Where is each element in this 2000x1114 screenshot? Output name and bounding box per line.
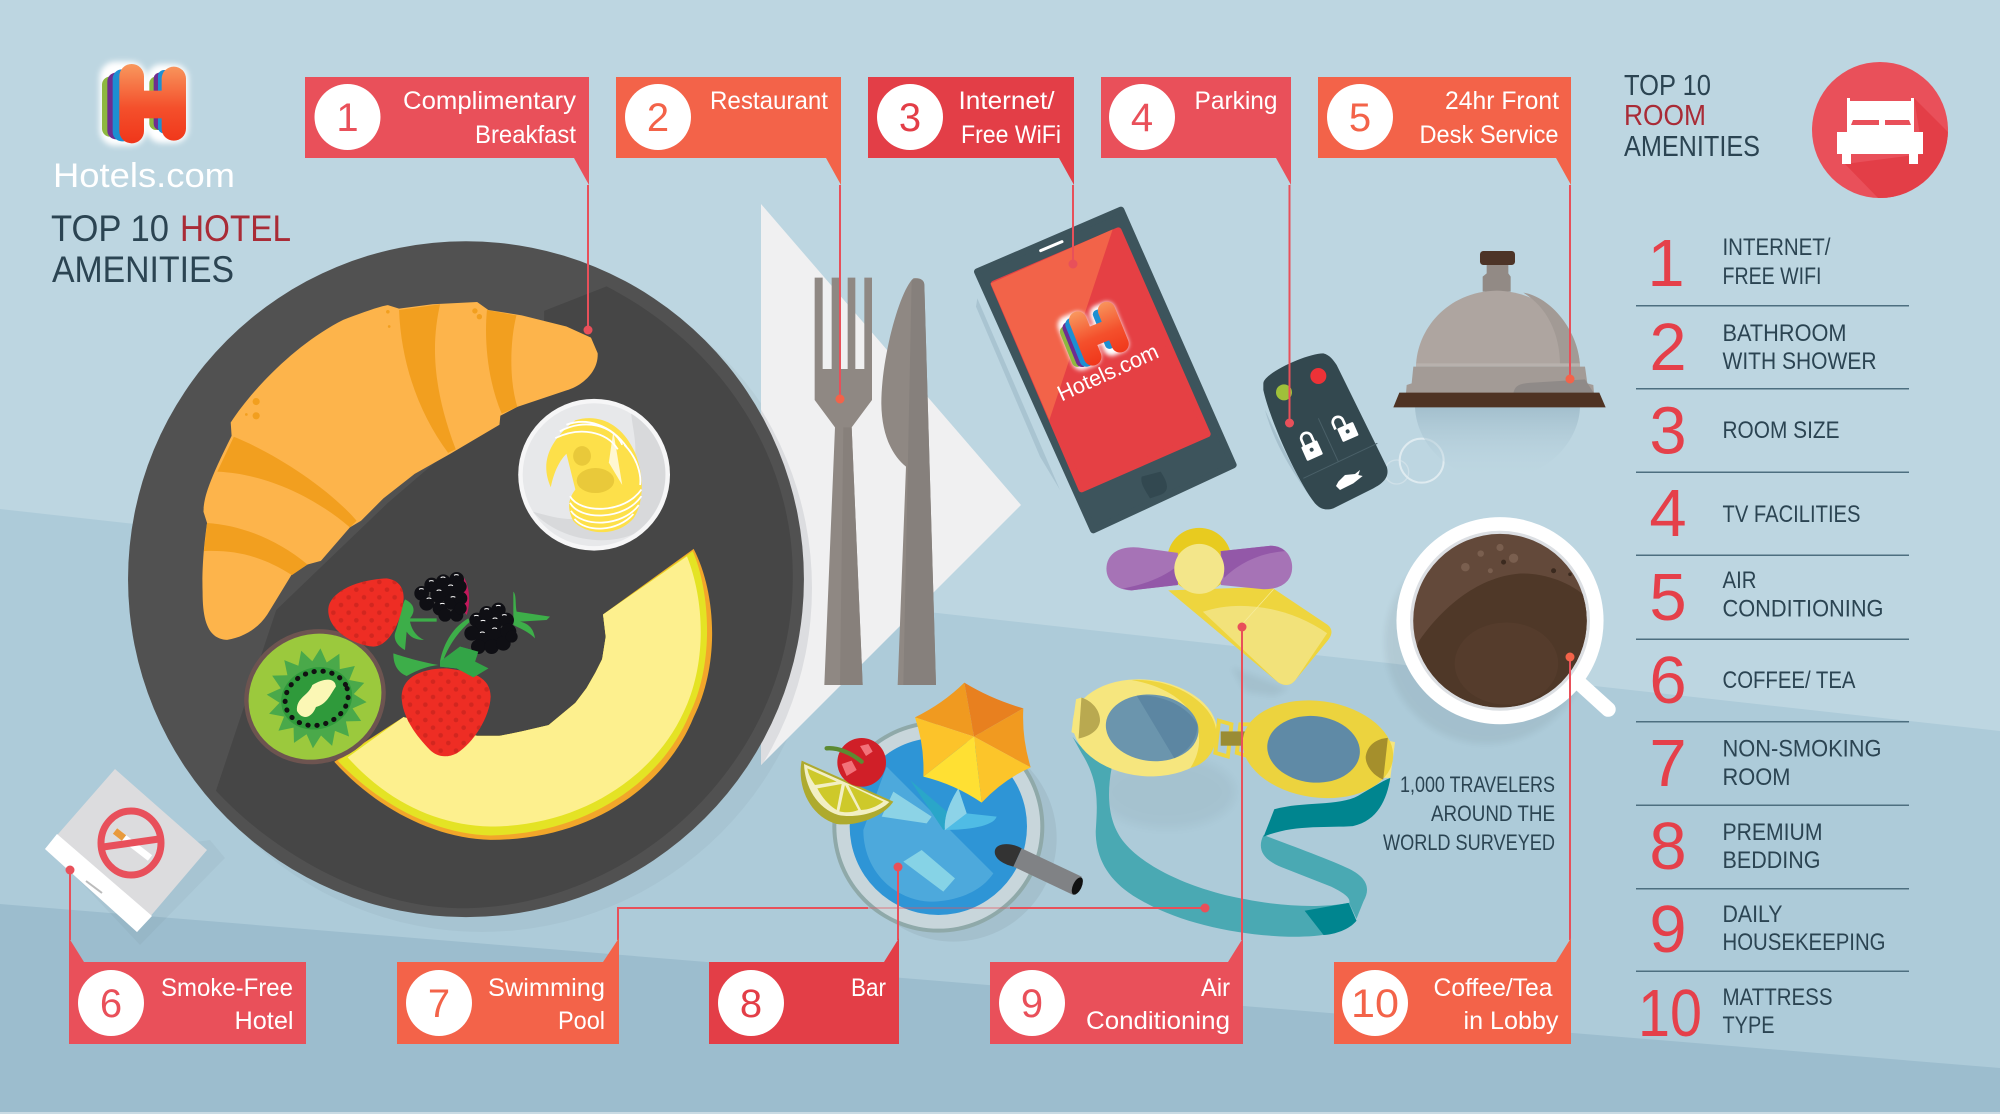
label 5: 24hr front desk service: 24hr Front: [1445, 87, 1559, 115]
fruit: kiwi, strawberries, blackberries: [222, 572, 550, 787]
heading: top 10 room amenities: AMENITIES: [1624, 131, 1760, 163]
shadow of bell: [1415, 407, 1580, 480]
phone wordmark: Hotels.com: [1053, 339, 1162, 406]
label 4: parking: [1101, 77, 1291, 185]
melon slice: [334, 549, 712, 840]
knife: [881, 278, 936, 685]
front strawberry: [402, 668, 491, 756]
butter dish: [518, 399, 670, 551]
row 8: BEDDING: [1722, 847, 1820, 874]
label 9: air conditioning: Conditioning: [1086, 1007, 1230, 1035]
strap: [1072, 737, 1390, 937]
room amenities ranking list: [1636, 226, 1909, 1051]
smoke-free sign: [45, 769, 225, 945]
heading: top 10 room amenities: [1624, 70, 1760, 163]
label 10: coffee/tea in lobby: [1334, 938, 1571, 1044]
label 9: air conditioning: [990, 938, 1243, 1044]
icon: no smoking: [101, 811, 161, 875]
row 1: INTERNET/: [1722, 234, 1831, 261]
row 6: [1649, 643, 1856, 718]
phone logo: [1055, 297, 1132, 373]
label 1: complimentary breakfast: Complimentary: [403, 87, 577, 115]
label 6: smoke-free hotel: [69, 938, 306, 1044]
cocktail: [801, 683, 1085, 942]
title: top 10 hotel amenities: AMENITIES: [52, 249, 234, 290]
row 5: AIR: [1722, 567, 1756, 594]
blackberry right: [464, 603, 518, 654]
label 9: air conditioning: Air: [1201, 974, 1230, 1002]
label 3: internet / free wifi: [868, 77, 1074, 185]
fork: [815, 278, 872, 685]
napkin: [761, 204, 1021, 765]
row 3: ROOM SIZE: [1722, 417, 1840, 444]
label 7: swimming pool: Pool: [558, 1007, 605, 1035]
label 7: swimming pool: [397, 938, 619, 1044]
label 1: complimentary breakfast: [305, 77, 589, 185]
key fob and bell: [1263, 251, 1606, 509]
heading: top 10 room amenities: TOP 10: [1624, 70, 1711, 102]
lime: [801, 761, 893, 824]
label 5: 24hr front desk service: [1318, 77, 1571, 185]
label 3: internet / free wifi: Free WiFi: [961, 121, 1061, 149]
keyrings: [1385, 439, 1444, 484]
back strawberry leaves: [395, 599, 437, 650]
title: top 10 hotel amenities: HOTEL: [180, 208, 291, 249]
row 2: BATHROOM: [1722, 320, 1846, 347]
lock closed: [1296, 430, 1323, 461]
row 4: [1649, 476, 1860, 551]
row 6: 6: [1649, 643, 1687, 718]
row 5: 5: [1649, 560, 1687, 635]
label 6: smoke-free hotel: 6: [100, 982, 122, 1026]
row 1: FREE WIFI: [1722, 263, 1822, 290]
label 6: smoke-free hotel: Smoke-Free: [161, 974, 293, 1002]
label 1: complimentary breakfast: Breakfast: [475, 121, 576, 149]
logo wordmark: Hotels.com: [53, 157, 235, 195]
kiwi: [222, 606, 408, 787]
leaves and stem: [393, 592, 550, 677]
row 10: TYPE: [1722, 1012, 1774, 1039]
title: top 10 hotel amenities: [51, 208, 291, 290]
row 9: DAILY: [1722, 901, 1782, 928]
label 9: air conditioning: 9: [1021, 982, 1043, 1026]
row 7: ROOM: [1722, 764, 1790, 791]
row 2: WITH SHOWER: [1722, 348, 1876, 375]
icon: H logo: [102, 64, 186, 143]
label 7: swimming pool: 7: [428, 982, 450, 1026]
row 4: 4: [1649, 476, 1687, 551]
drink: [850, 738, 1027, 915]
row 8: PREMIUM: [1722, 819, 1822, 846]
plate shadow: [144, 256, 820, 932]
label 3: internet / free wifi: Internet/: [958, 87, 1055, 115]
survey note: [1383, 772, 1555, 855]
logo: Hotels.com: [53, 64, 235, 195]
umbrella: [915, 683, 1031, 803]
row 1: 1: [1647, 226, 1685, 301]
row 3: [1649, 394, 1840, 468]
label 2: restaurant: Restaurant: [710, 87, 828, 115]
label 2: restaurant: 2: [647, 96, 669, 140]
row 1: [1647, 226, 1831, 301]
survey note: AROUND THE: [1431, 801, 1555, 826]
row 9: 9: [1649, 892, 1687, 967]
shadow: [1099, 756, 1235, 828]
straw: [995, 844, 1085, 896]
right frame: [1236, 691, 1400, 808]
row 5: CONDITIONING: [1722, 596, 1884, 622]
row 5: [1649, 560, 1884, 635]
survey note: 1,000 TRAVELERS: [1400, 772, 1555, 797]
row 10: 10: [1638, 976, 1702, 1051]
phone shadow: [976, 298, 1060, 490]
label 8: bar: Bar: [851, 974, 886, 1002]
row 2: [1649, 310, 1876, 385]
label 2: restaurant: [616, 77, 841, 185]
car icon: [1336, 470, 1363, 490]
croissant: [202, 302, 598, 640]
plate with breakfast: [128, 241, 804, 917]
label 5: 24hr front desk service: Desk Service: [1420, 121, 1558, 149]
blackberry left: [414, 572, 469, 622]
label 10: coffee/tea in lobby: 10: [1351, 982, 1399, 1026]
label 1: complimentary breakfast: 1: [336, 96, 359, 140]
title: top 10 hotel amenities: TOP 10: [51, 208, 169, 249]
row 10: [1638, 976, 1832, 1051]
row 9: HOUSEKEEPING: [1722, 929, 1886, 956]
label 4: parking: 4: [1131, 96, 1153, 140]
cherry: [827, 738, 886, 787]
label 5: 24hr front desk service: 5: [1349, 96, 1371, 140]
row 7: 7: [1649, 726, 1687, 801]
goggles: [1068, 672, 1400, 937]
row 6: COFFEE/ TEA: [1722, 667, 1856, 694]
label 7: swimming pool: Swimming: [488, 974, 605, 1002]
row 2: 2: [1649, 310, 1687, 385]
heading: top 10 room amenities: ROOM: [1624, 100, 1706, 132]
row 8: [1649, 809, 1822, 884]
leader lines and dots: [66, 185, 1574, 940]
label 10: coffee/tea in lobby: in Lobby: [1464, 1007, 1559, 1035]
row 3: 3: [1649, 394, 1687, 468]
label 10: coffee/tea in lobby: Coffee/Tea: [1434, 974, 1553, 1002]
bridge: [1215, 721, 1251, 756]
icon: car key fob: [1263, 353, 1388, 509]
coffee cup: [1385, 517, 1608, 744]
fan: [1106, 528, 1331, 696]
back strawberry: [328, 578, 404, 647]
lock open: [1331, 412, 1359, 443]
left frame: [1068, 672, 1222, 783]
row 7: NON-SMOKING: [1722, 736, 1882, 762]
shadow: [1265, 410, 1315, 503]
label 6: smoke-free hotel: Hotel: [234, 1007, 294, 1035]
row 9: [1649, 892, 1886, 967]
label 8: bar: [709, 938, 899, 1044]
row 7: [1649, 726, 1882, 801]
row 4: TV FACILITIES: [1722, 501, 1860, 528]
survey note: WORLD SURVEYED: [1383, 830, 1555, 855]
row 8: 8: [1649, 809, 1687, 884]
icon: smartphone: [977, 210, 1233, 530]
cutlery and phone: [815, 210, 1233, 685]
icon: reception bell: [1393, 251, 1606, 407]
icon: bed in red circle: [1812, 62, 1948, 198]
label 4: parking: Parking: [1194, 87, 1278, 115]
label 3: internet / free wifi: 3: [899, 96, 921, 140]
row 10: MATTRESS: [1722, 984, 1832, 1011]
label 8: bar: 8: [740, 982, 762, 1026]
